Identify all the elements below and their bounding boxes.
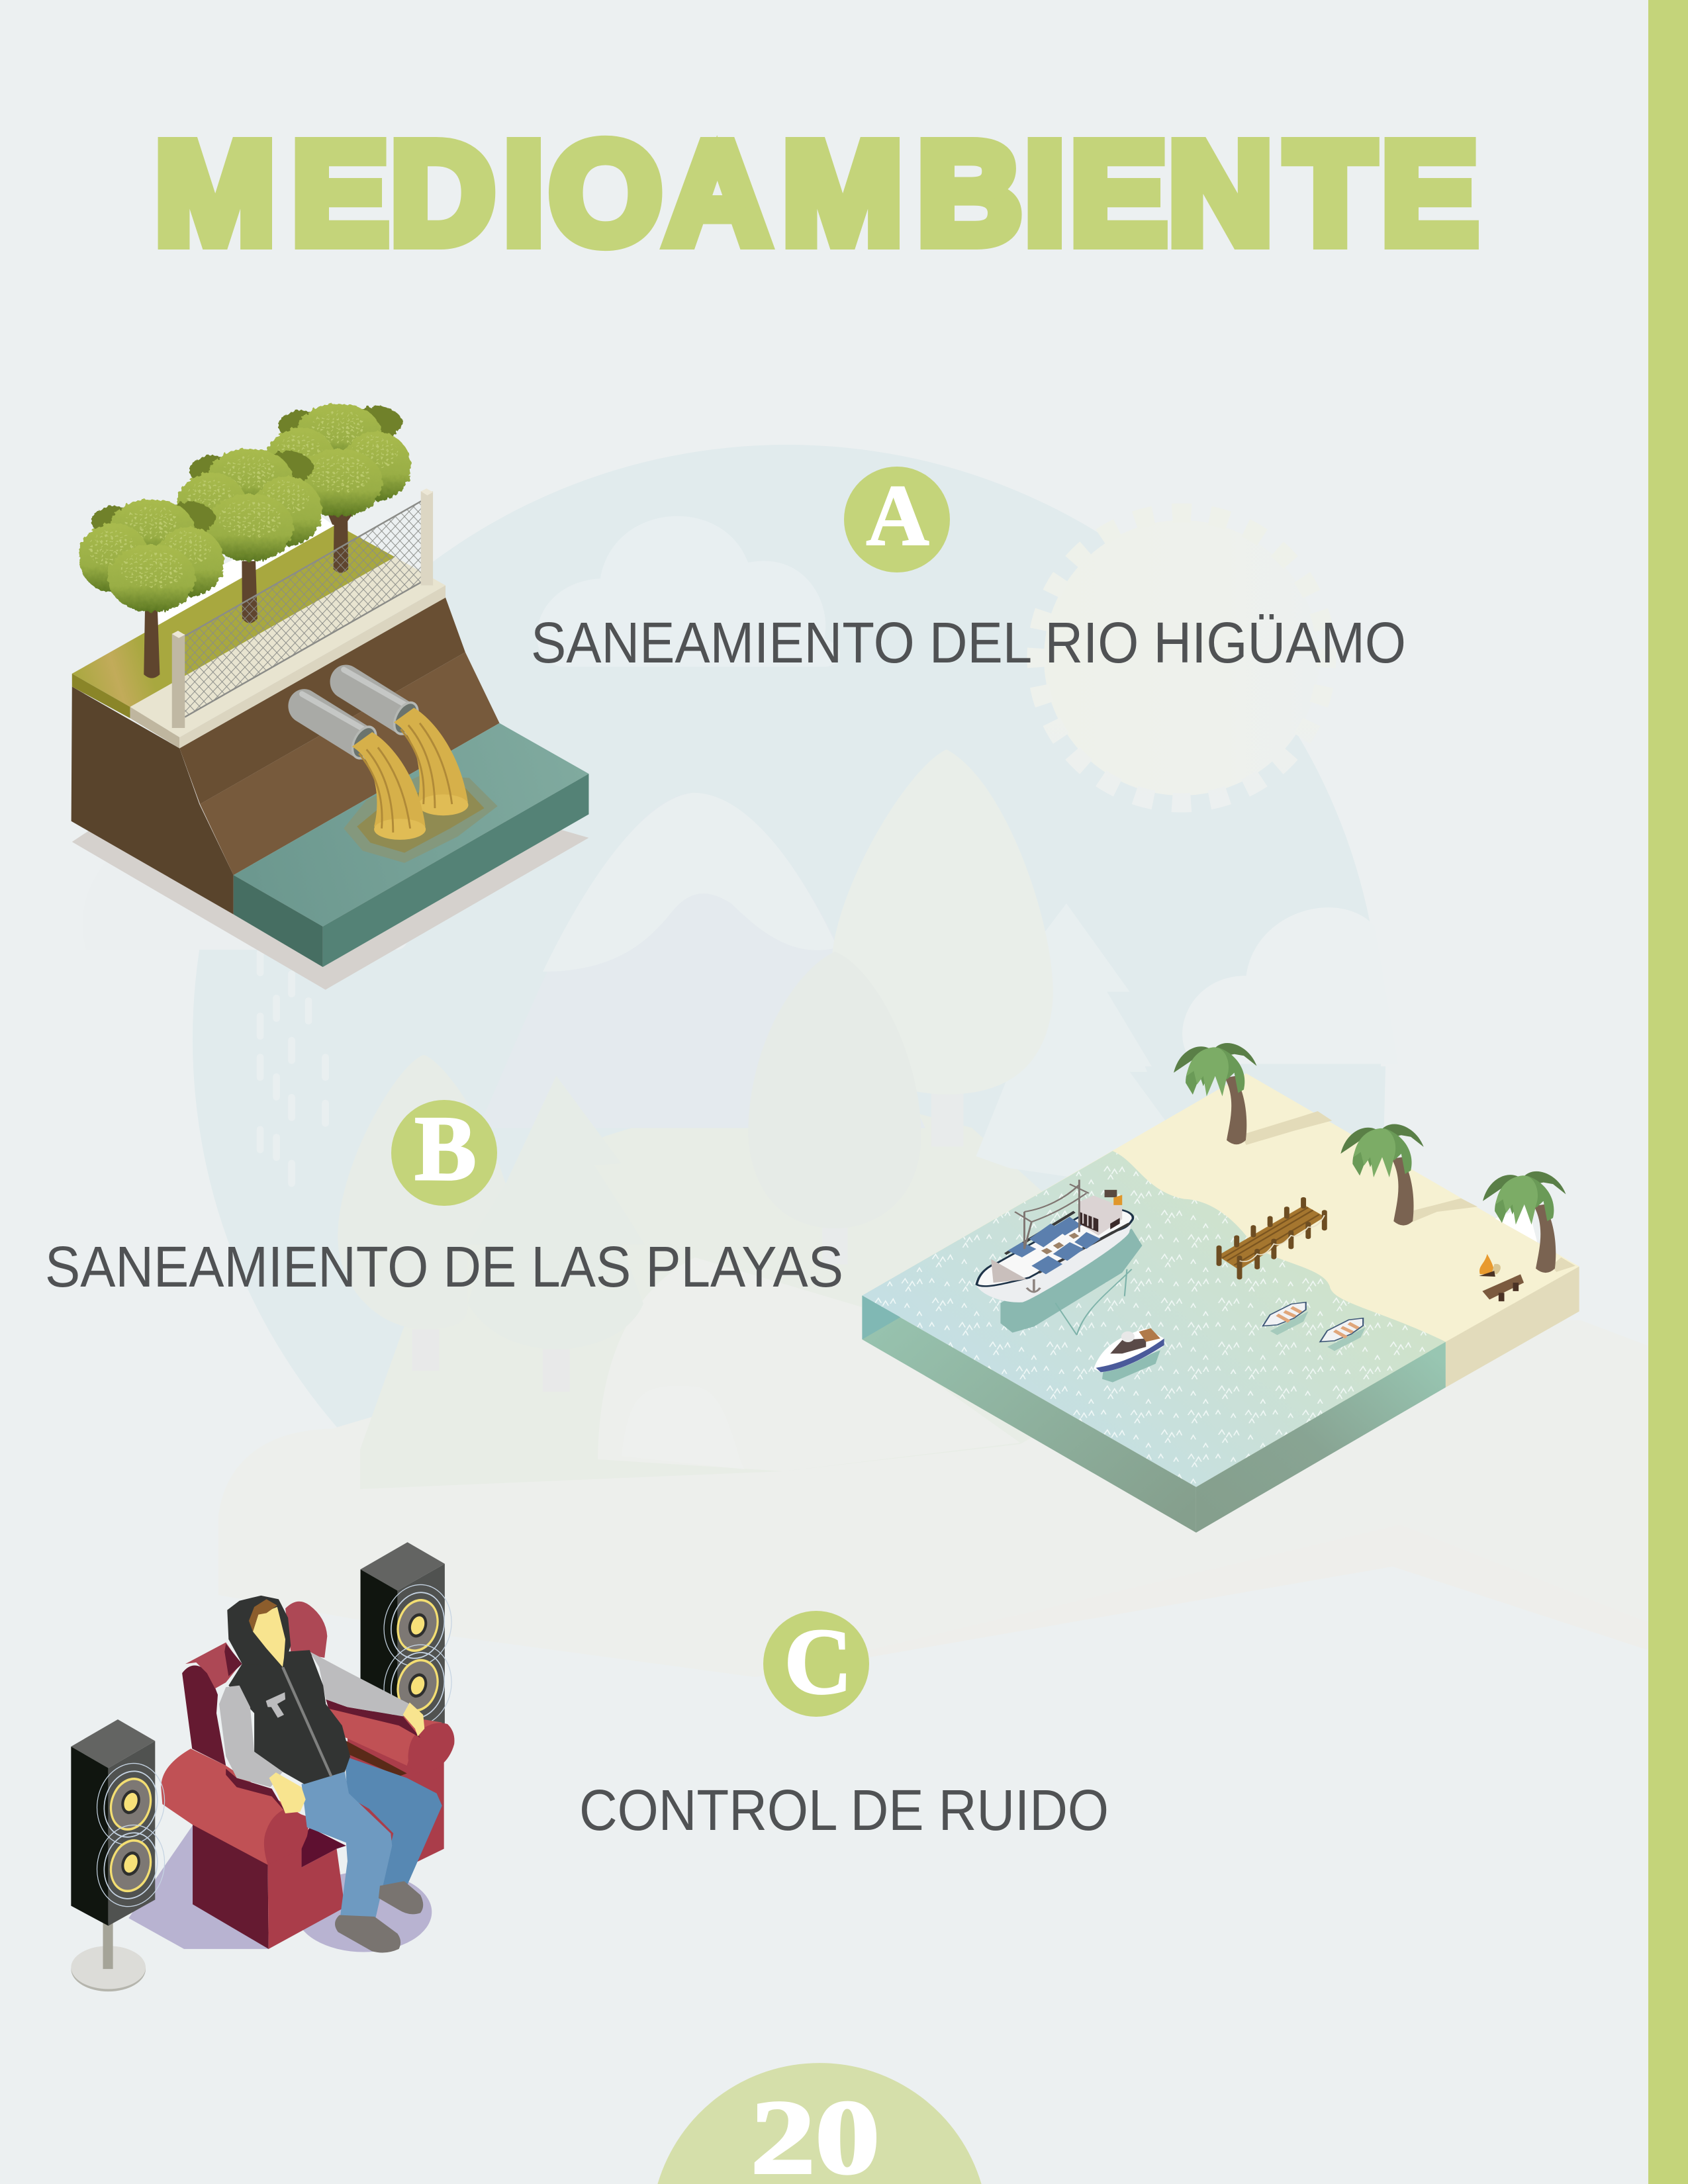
armchair back <box>182 1602 444 1864</box>
ship shadow <box>1000 1229 1142 1335</box>
palm shadows <box>1241 1111 1575 1272</box>
scene B: beach illustration <box>862 1043 1579 1533</box>
letter badge C <box>763 1609 869 1717</box>
background mountain snow cap <box>543 793 837 972</box>
background rain dashes <box>257 949 329 1187</box>
armchair front base <box>193 1823 346 1949</box>
person vest <box>228 1650 350 1784</box>
sewage flow 1 <box>352 732 426 840</box>
concrete strip top <box>130 557 445 737</box>
rowing boats <box>1263 1302 1366 1351</box>
chain-link fence mesh <box>185 500 423 717</box>
letter badge C: C <box>784 1609 852 1713</box>
background gear <box>1037 513 1327 803</box>
water corner <box>862 1296 900 1340</box>
palm tree 3 <box>1483 1171 1566 1273</box>
fence rail <box>185 500 423 717</box>
fence post left <box>172 631 185 728</box>
water left face <box>862 1296 1196 1533</box>
scene C: noise illustration <box>71 1542 464 1991</box>
sand top <box>862 1073 1579 1487</box>
pollution stain <box>344 776 498 863</box>
background pine trunk <box>543 1349 570 1392</box>
scene A: river sanitation illustration <box>71 404 588 989</box>
letter badge A <box>844 467 950 572</box>
vest logo <box>266 1692 285 1718</box>
soil left face <box>71 687 234 915</box>
drainage pipe 1 <box>302 694 381 762</box>
sea surface <box>862 1151 1446 1487</box>
letter badge A: A <box>866 467 929 564</box>
tree 2 canopy <box>177 449 322 561</box>
background hand band <box>755 1525 1648 1677</box>
heading C: CONTROL DE RUIDO <box>579 1778 1109 1843</box>
armchair left arm <box>161 1749 308 1865</box>
campfire <box>1479 1254 1501 1277</box>
background cloud left <box>83 778 411 950</box>
grass edge <box>72 674 130 718</box>
background globe circle <box>193 445 1382 1633</box>
river top <box>234 723 588 927</box>
background hand highlight <box>598 1257 1020 1471</box>
title: MEDIOAMBIENTE <box>155 113 1477 274</box>
background illustration: nature watermark <box>83 445 1648 1677</box>
tree 3 canopy <box>266 404 411 516</box>
water right face <box>1196 1342 1446 1533</box>
background inner arch <box>622 1386 745 1469</box>
palm tree 2 <box>1340 1124 1424 1226</box>
vest zip <box>283 1667 331 1776</box>
soil upper slope <box>179 598 465 804</box>
drainage pipe 2 <box>344 670 422 738</box>
white gap behind palm <box>1495 1205 1537 1242</box>
background ground hand <box>218 1297 1648 1677</box>
background middle tree trunk <box>822 1224 848 1265</box>
right speaker <box>361 1542 464 1740</box>
person left arm <box>219 1686 306 1813</box>
page number <box>657 2063 982 2184</box>
palm tree 1 <box>1174 1043 1256 1144</box>
background tall tree trunk <box>931 1092 963 1146</box>
background pine left <box>468 1076 645 1349</box>
river left face <box>234 875 323 967</box>
soil lower slope <box>200 652 500 875</box>
ground shadow <box>72 735 588 989</box>
person hair <box>249 1599 277 1631</box>
sewage flow 2 <box>394 707 468 815</box>
left speaker <box>71 1719 177 1991</box>
person hood <box>227 1596 291 1667</box>
background tall tree <box>833 749 1053 1095</box>
background middle tree <box>748 952 921 1228</box>
river right face <box>323 774 588 967</box>
heading A: SANEAMIENTO DEL RIO HIGÜAMO <box>531 611 1406 675</box>
pollution stain inner <box>357 788 485 853</box>
heading B: SANEAMIENTO DE LAS PLAYAS <box>45 1235 843 1299</box>
sea ripples <box>862 1151 1446 1487</box>
tree trunks <box>144 500 363 678</box>
concrete strip right <box>179 585 445 749</box>
person right arm <box>310 1652 424 1738</box>
concrete strip left <box>130 707 179 749</box>
sand front face <box>1446 1267 1579 1387</box>
armchair right arm <box>328 1709 454 1776</box>
background mountain <box>478 793 925 1128</box>
wooden pier <box>1217 1199 1325 1278</box>
background leaf tree trunk <box>412 1329 439 1371</box>
background leaf tree <box>338 1055 506 1329</box>
letter badge B: B <box>414 1097 477 1200</box>
background pine tree right <box>976 903 1192 1184</box>
background top cloud <box>537 516 840 667</box>
grass top <box>72 525 395 707</box>
speedboat <box>1094 1328 1164 1383</box>
fence post right <box>421 488 433 585</box>
floor shadow <box>128 1824 432 1952</box>
background blue block right <box>1145 1066 1385 1232</box>
cargo ship <box>976 1180 1133 1302</box>
person shoes <box>335 1881 423 1952</box>
letter badge B <box>391 1097 497 1206</box>
right side bar <box>1648 0 1688 2184</box>
background right cloud <box>1182 907 1398 1064</box>
person trousers <box>302 1756 442 1923</box>
log bench <box>1482 1274 1524 1301</box>
background hill <box>360 1092 1192 1489</box>
white gap behind trees <box>156 516 336 630</box>
tree 1 canopy <box>79 499 224 612</box>
person face <box>253 1607 285 1667</box>
